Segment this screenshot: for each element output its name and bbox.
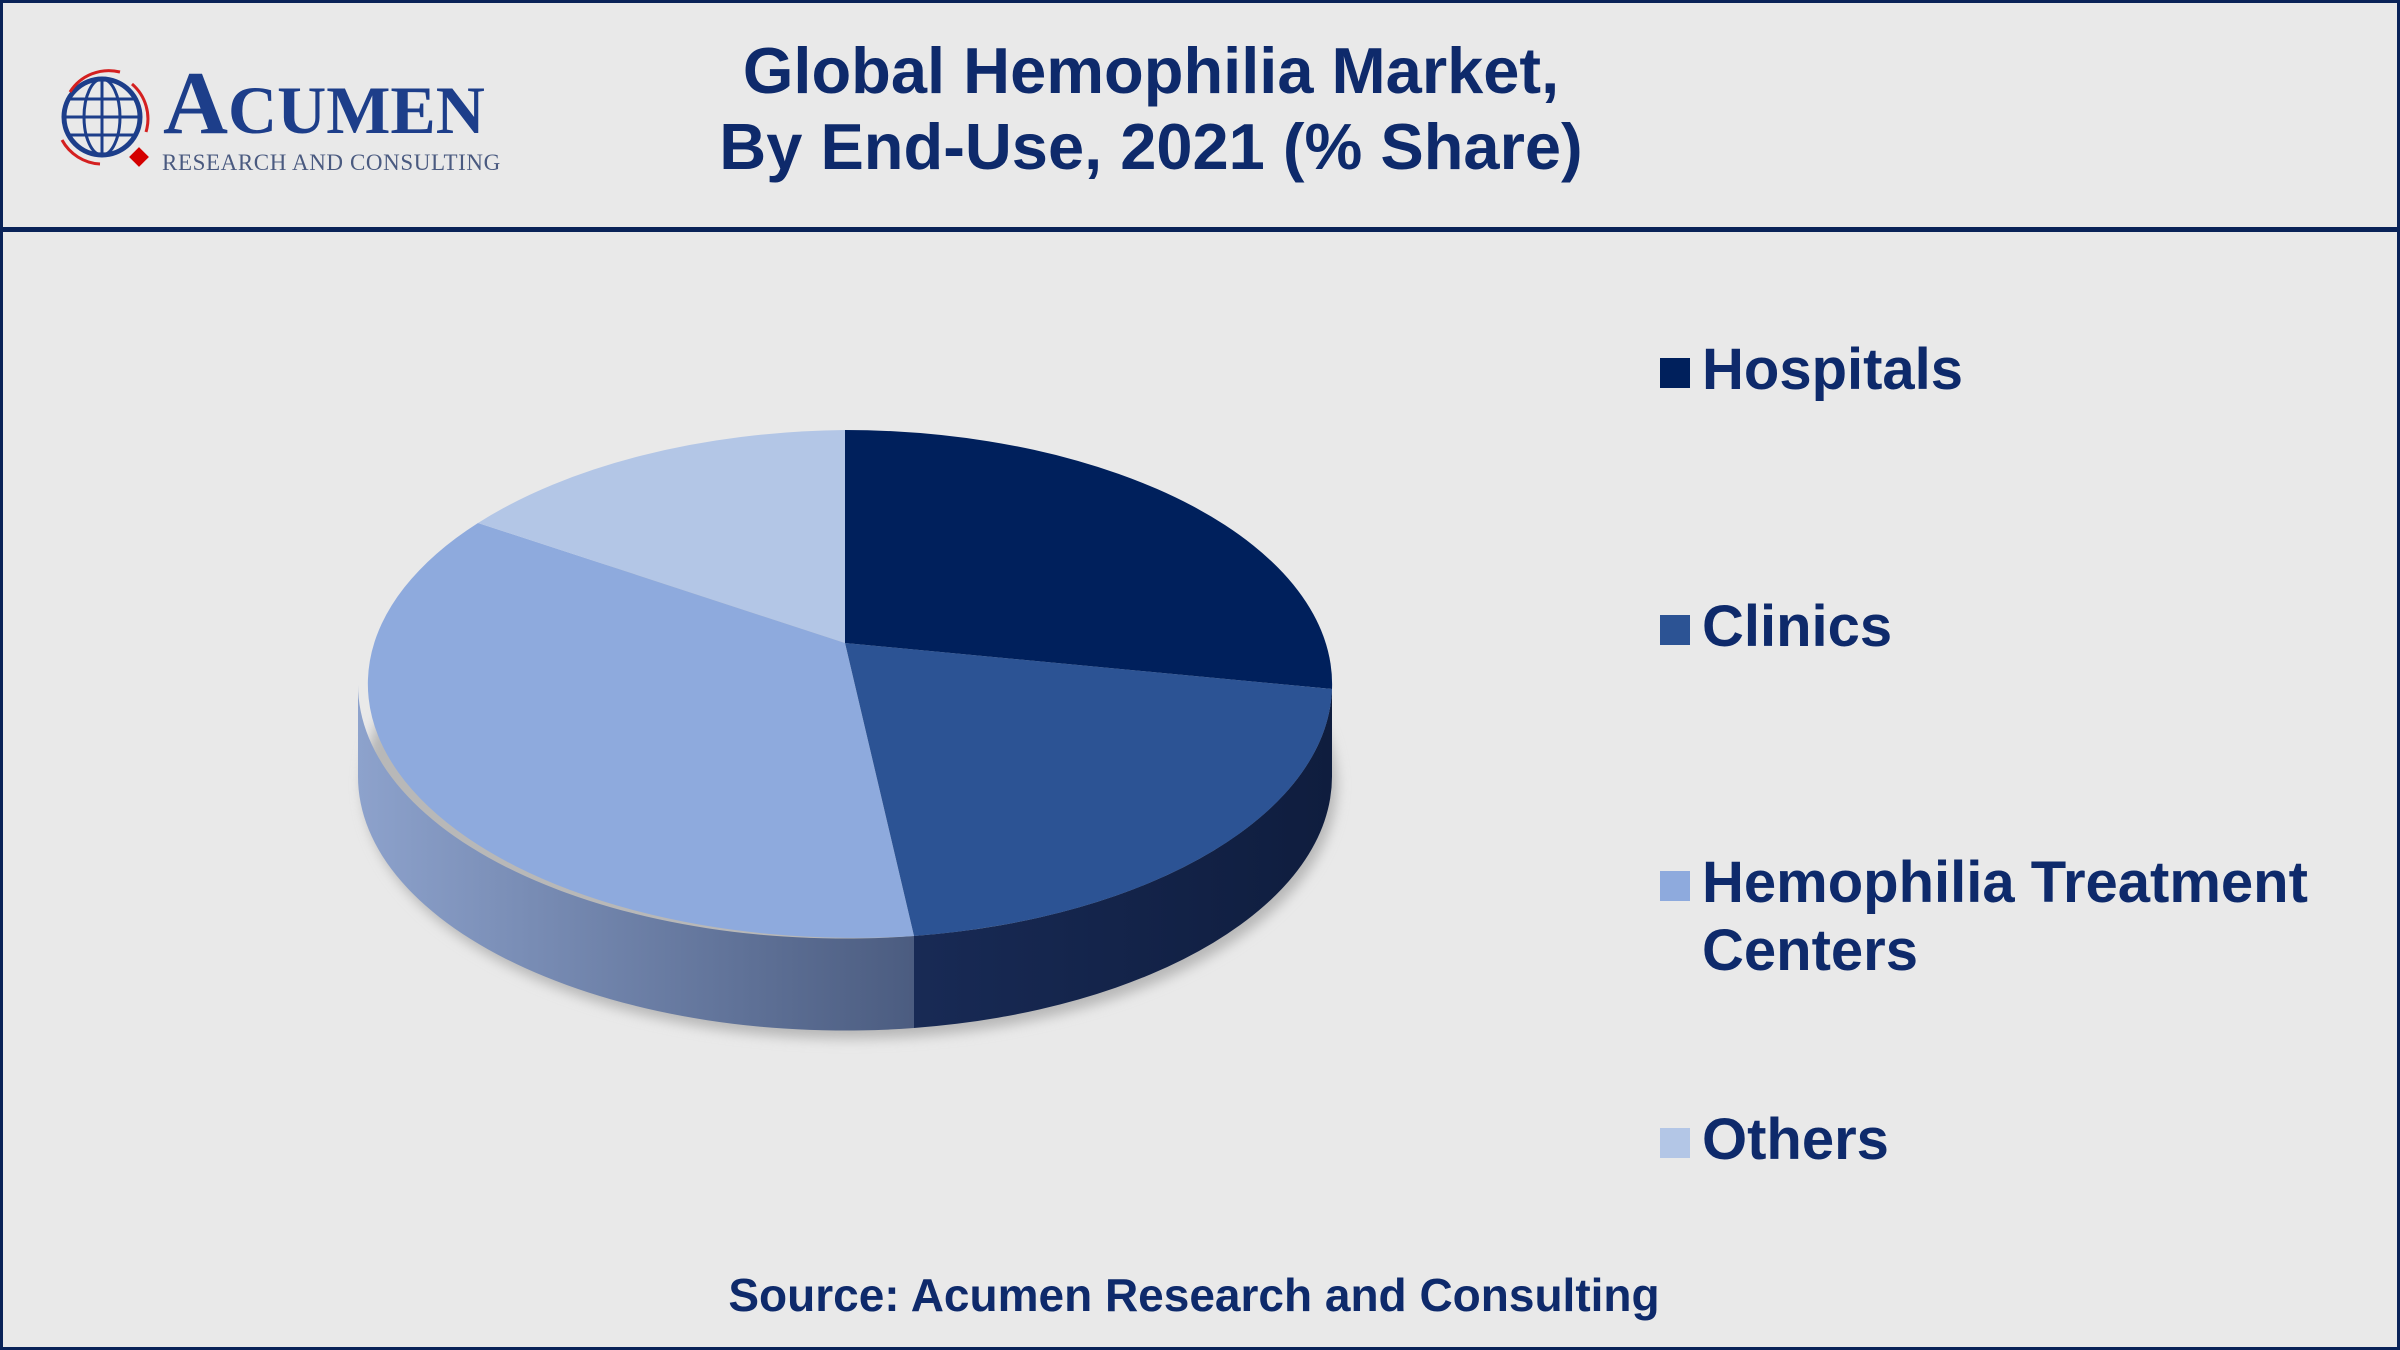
text: Hospitals <box>1702 337 1963 402</box>
text: Others <box>1702 1107 1889 1172</box>
side: Clinics <box>914 684 1332 1028</box>
slice: HTC <box>368 523 914 938</box>
text: Centers <box>1702 918 1918 983</box>
text: Clinics <box>1702 594 1892 659</box>
icon: globe <box>60 69 150 167</box>
logo: RESEARCH AND CONSULTING <box>162 150 501 175</box>
legend: HTC <box>1660 850 2308 983</box>
title: By End-Use, 2021 (% Share) <box>719 110 1583 183</box>
slice: Others <box>478 430 845 643</box>
legend: Others <box>1660 1107 1889 1172</box>
logo text: ACUMEN <box>163 54 485 153</box>
title: Global Hemophilia Market, <box>743 34 1559 107</box>
side: HTC <box>358 684 914 1031</box>
pie chart <box>358 430 1342 1044</box>
source: Source: Acumen Research and Consulting <box>728 1269 1660 1321</box>
title <box>719 34 1583 183</box>
slice: Clinics <box>845 643 1332 936</box>
legend: Hospitals <box>1660 337 1963 402</box>
slice: Hospitals <box>845 430 1332 689</box>
logo <box>60 54 501 175</box>
text: Hemophilia Treatment <box>1702 850 2308 915</box>
legend: Clinics <box>1660 594 1892 659</box>
